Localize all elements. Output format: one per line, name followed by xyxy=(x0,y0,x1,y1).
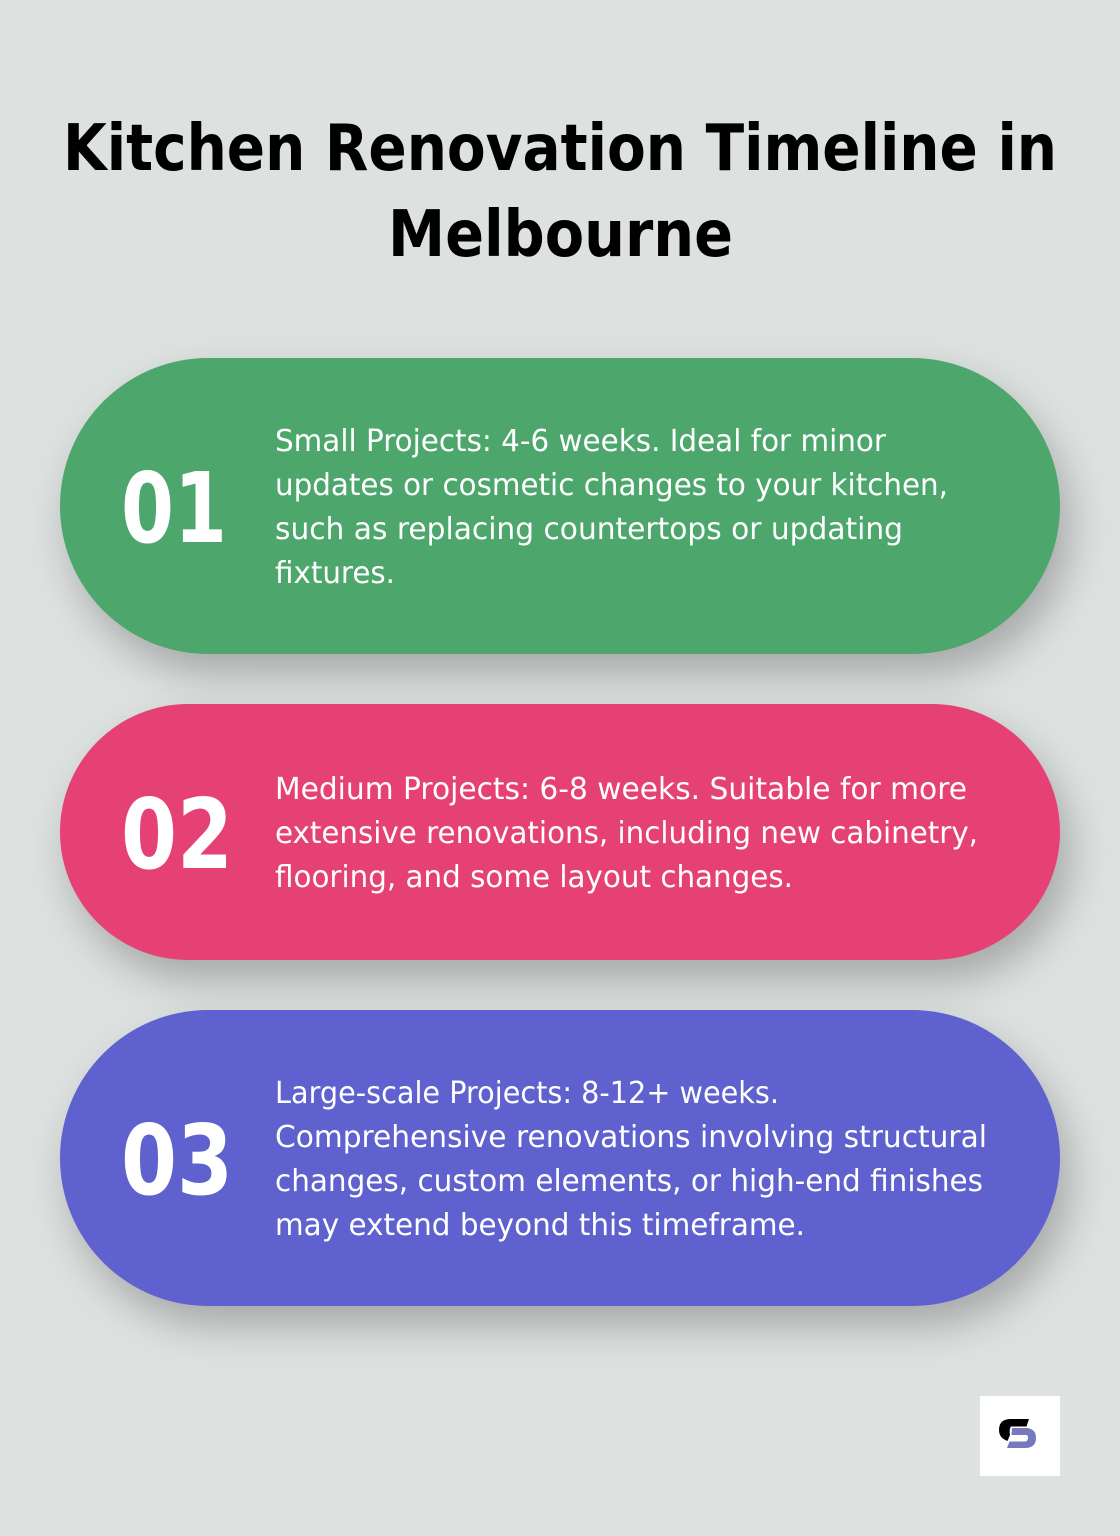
text: large-scale projects description: Large-scale Projects: 8-12+ weeks. xyxy=(275,1076,779,1111)
panel: large-scale projects xyxy=(60,1010,1060,1306)
icon: logo badge xyxy=(980,1396,1060,1476)
text: small projects description: such as replacing countertops or updating xyxy=(275,512,903,547)
number 02: 02 xyxy=(121,778,233,891)
text: large-scale projects description: may extend beyond this timeframe. xyxy=(275,1208,805,1243)
text: large-scale projects description xyxy=(275,1076,987,1243)
text: medium projects description xyxy=(275,772,978,895)
text: small projects description: fixtures. xyxy=(275,556,395,591)
number 01: 01 xyxy=(121,452,227,565)
text: medium projects description: extensive renovations, including new cabinetry, xyxy=(275,816,978,851)
panel: small projects xyxy=(60,358,1060,654)
title xyxy=(63,112,1057,272)
text: small projects description: updates or cosmetic changes to your kitchen, xyxy=(275,468,948,503)
number 03: 03 xyxy=(121,1104,233,1217)
text: small projects description xyxy=(275,424,948,591)
panel: medium projects xyxy=(60,704,1060,960)
title: Melbourne xyxy=(388,198,733,272)
text: medium projects description: flooring, and some layout changes. xyxy=(275,860,793,895)
text: large-scale projects description: changes, custom elements, or high-end finishes xyxy=(275,1164,983,1199)
text: medium projects description: Medium Projects: 6-8 weeks. Suitable for more xyxy=(275,772,967,807)
text: large-scale projects description: Comprehensive renovations involving structural xyxy=(275,1120,987,1155)
text: small projects description: Small Projects: 4-6 weeks. Ideal for minor xyxy=(275,424,886,459)
